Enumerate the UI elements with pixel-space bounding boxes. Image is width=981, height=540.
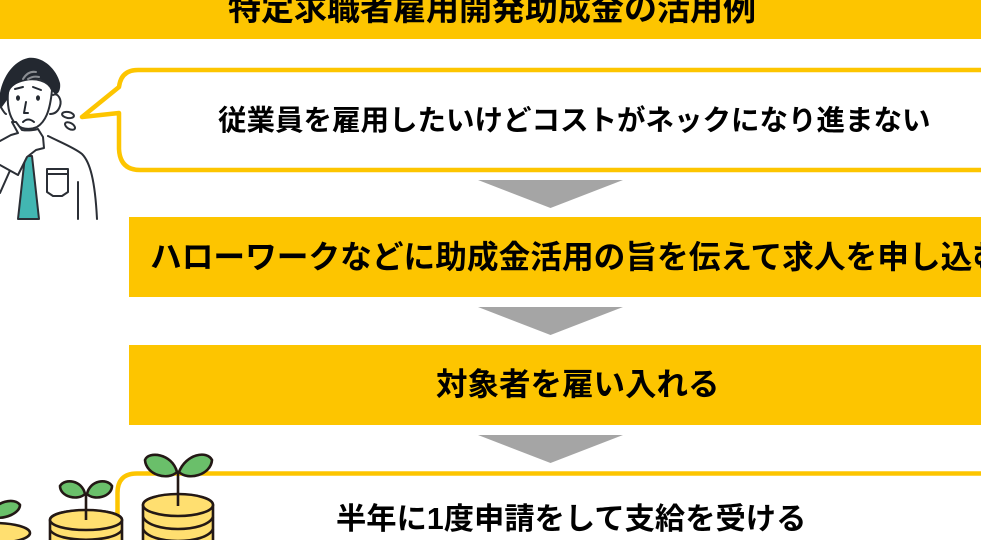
title bar — [0, 0, 981, 39]
arrow 2 — [478, 307, 623, 335]
icon: worried man — [0, 58, 98, 220]
result text: 半年に1度申請をして支給を受ける — [336, 503, 806, 536]
speech bubble: worry — [80, 68, 981, 172]
icon: coins with sprouts — [0, 453, 214, 540]
step bar: apply — [129, 217, 981, 297]
hire text: 対象者を雇い入れる — [436, 366, 720, 402]
apply text: ハローワークなどに助成金活用の旨を伝えて求人を申し込む — [150, 239, 981, 275]
worry text: 従業員を雇用したいけどコストがネックになり進まない — [218, 105, 931, 137]
step bar: hire — [129, 345, 981, 425]
result box — [115, 471, 981, 515]
arrow 1 — [478, 180, 623, 208]
arrow 3 — [478, 435, 623, 463]
